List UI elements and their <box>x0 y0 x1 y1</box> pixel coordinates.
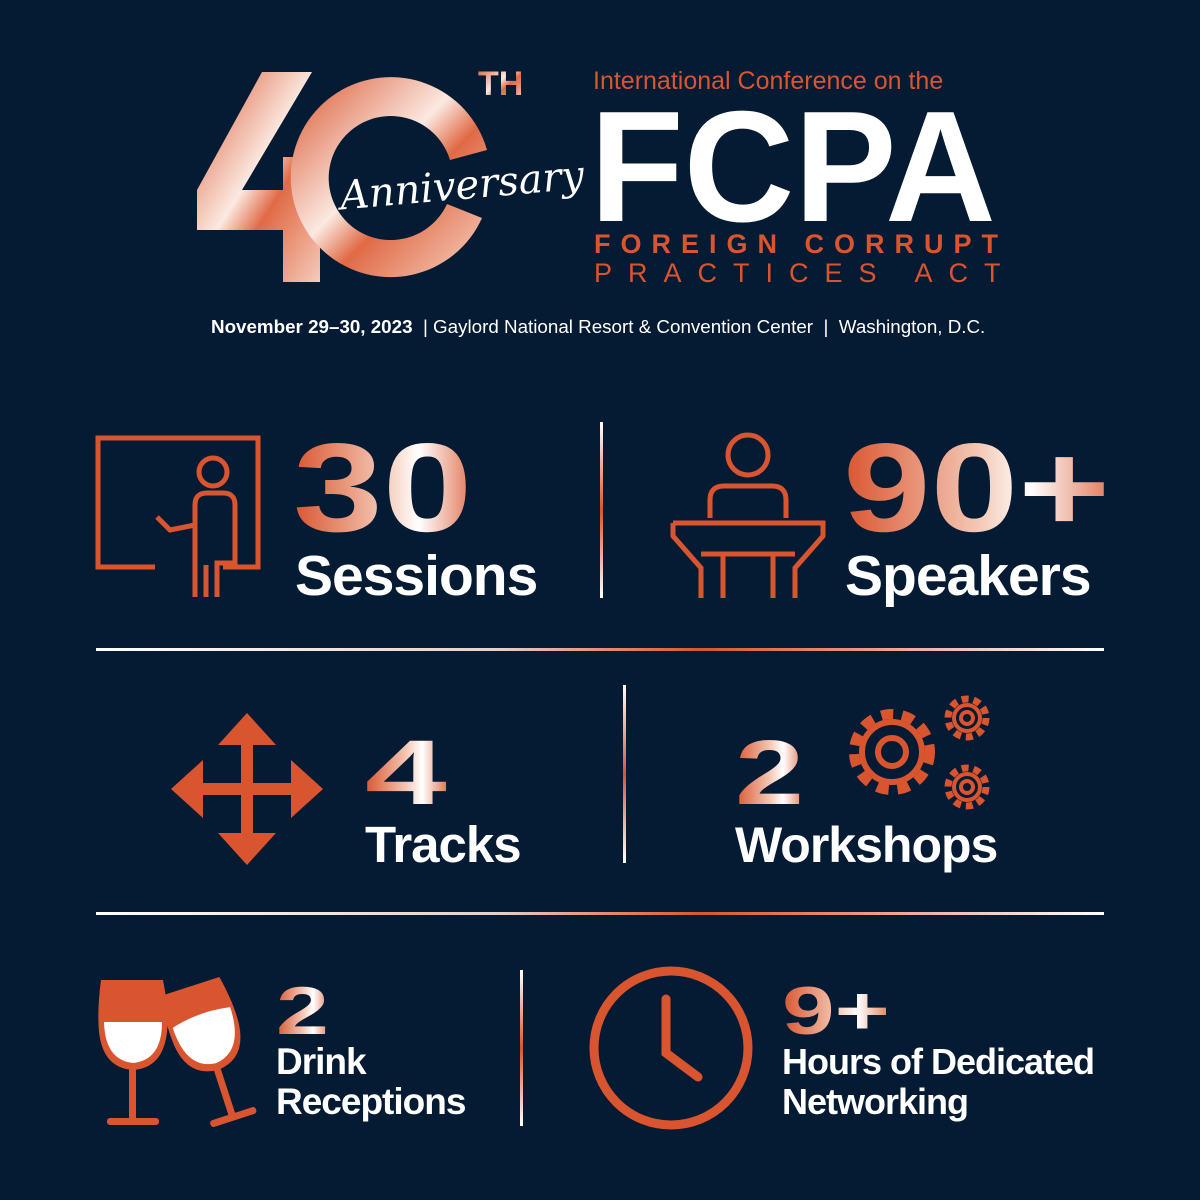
stat: 2 drink receptions: Drink <box>276 1041 366 1082</box>
icon: speaker at podium <box>670 432 826 598</box>
logo: 40th anniversary: Anniversary <box>334 152 587 220</box>
logo: 40th anniversary <box>197 65 587 282</box>
stat: 9+ hours networking <box>782 973 1094 1122</box>
stat: 30 sessions: 30 <box>293 417 472 558</box>
logo: 40th anniversary: TH <box>478 65 523 103</box>
stat: 2 workshops: 2 <box>735 722 804 824</box>
icon: wine glasses <box>98 977 256 1127</box>
stat: 9+ hours networking: 9+ <box>782 973 890 1049</box>
date line: November 29–30, 2023 | Gaylord National Resort & Convention Center | Washington, D.C. <box>211 316 985 337</box>
stat: 9+ hours networking: Hours of Dedicated <box>782 1041 1094 1082</box>
icon: presenter board <box>96 436 260 597</box>
stat: 2 drink receptions: 2 <box>276 973 329 1049</box>
stat: 2 workshops: Workshops <box>735 817 997 873</box>
stat: 2 workshops <box>735 722 997 873</box>
stat: 2 drink receptions: Receptions <box>276 1081 465 1122</box>
stat: 30 sessions: Sessions <box>295 544 537 608</box>
stat: 90+ speakers: Speakers <box>845 544 1091 608</box>
stat: 90+ speakers: 90+ <box>843 417 1110 558</box>
icon: clock <box>590 966 752 1130</box>
icon: four-way arrows <box>171 713 323 865</box>
icon: gears <box>849 696 990 810</box>
stat: 2 drink receptions <box>276 973 465 1122</box>
title FCPA: FCPA <box>590 79 996 255</box>
stat: 9+ hours networking: Networking <box>782 1081 968 1122</box>
title: foreign corrupt: FOREIGN CORRUPT <box>594 229 1008 259</box>
stat: 4 tracks <box>365 722 521 873</box>
title: practices act: PRACTICES ACT <box>594 258 1017 288</box>
subtitle: International Conference on the <box>593 67 943 95</box>
stat: 30 sessions <box>293 417 537 608</box>
stat: 4 tracks: Tracks <box>365 816 521 873</box>
stat: 4 tracks: 4 <box>365 722 447 824</box>
